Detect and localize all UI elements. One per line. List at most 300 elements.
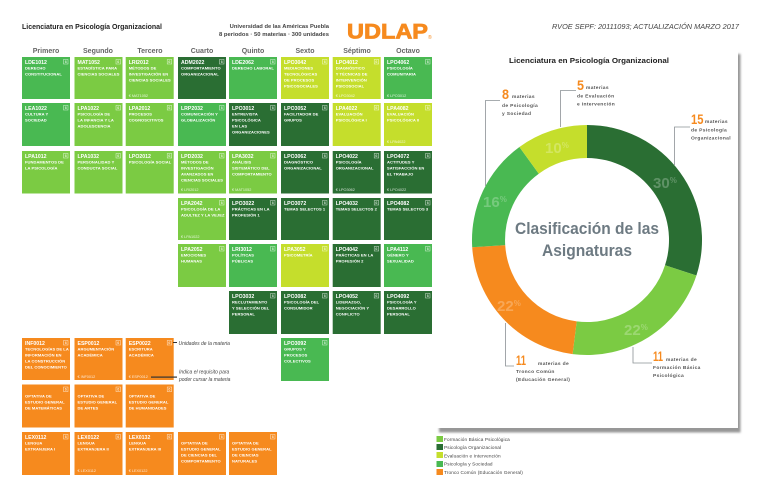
callout: 11 materias formación básica: 11	[653, 349, 663, 364]
donut center label: Clasificación de las	[515, 220, 659, 238]
legend: Psicología y Sociedad	[444, 462, 493, 466]
callout: 5 materias	[560, 78, 615, 127]
card: LPO4042: LPO4042	[336, 247, 358, 253]
card: ESP0012: ACADÉMICA	[78, 352, 103, 358]
university info: Universidad de las Américas Puebla	[230, 24, 330, 30]
card: LPO3022: PROFESIÓN 1	[232, 212, 260, 218]
card: LPO3082: PSICOLOGÍA DEL	[284, 300, 320, 304]
card: LEX0132: € LEX0122	[129, 469, 147, 473]
semester headers: Octavo	[396, 48, 420, 55]
card: optativa ciencias naturales: ESTUDIO GENERAL	[232, 446, 272, 452]
card: LPA1032: LPA1032	[78, 154, 99, 160]
card: LPO3022: 6	[272, 201, 274, 205]
card: LPO4072: LPO4072	[387, 154, 409, 160]
card: ESP0022: ESCRITURA	[129, 346, 153, 352]
card: LPO4062: 6	[427, 60, 429, 64]
semester headers: Quinto	[242, 48, 264, 55]
card: LPA2052: EMOCIONES	[181, 252, 206, 258]
card: optativa humanidades: OPTATIVA DE	[129, 394, 156, 398]
card: INF0012: INFORMACIÓN EN	[25, 352, 61, 358]
card: LPA3032: COMPORTAMIENTO	[232, 172, 272, 176]
callout: 11 materias formación básica	[633, 347, 701, 379]
card: LPO3072: TEMAS SELECTOS 1	[284, 206, 326, 212]
card: LPA1022: PSICOLOGÍA DE	[78, 112, 110, 116]
accreditation note: RVOE SEPF: 20111093; ACTUALIZACIÓN MARZO 2017	[552, 22, 740, 31]
card: LDE1012: 6	[65, 60, 67, 64]
card: LPA1032: CONDUCTA SOCIAL	[78, 166, 118, 170]
donut chart: 30	[653, 175, 670, 192]
card: LPA2052: 6	[221, 247, 223, 251]
callout: 11 materias tronco común: 11	[516, 353, 526, 368]
card: LPO4082: LPO4082	[387, 201, 409, 207]
card: LEX0122: LEX0122	[78, 435, 99, 441]
card: optativa humanidades: 6	[168, 388, 170, 392]
card: LPO3032: LPO3032	[232, 294, 254, 300]
card: LRP2032: COMUNICACIÓN Y	[181, 112, 218, 116]
card: LRP2032: GLOBALIZACIÓN	[181, 118, 215, 122]
card: LEA1022: 6	[65, 106, 67, 110]
semester headers: Séptimo	[343, 48, 371, 55]
card: LPA3032: 6	[272, 154, 274, 158]
card: LEA1022: CULTURA Y	[25, 112, 49, 116]
card: LDE1012: DERECHO	[25, 66, 46, 70]
card: optativa ciencias del comportamiento: ESTUDIO GENERAL	[181, 446, 221, 452]
card: LPD2032: INVESTIGACIÓN	[181, 166, 214, 170]
card: ADM2022: 6	[221, 60, 223, 64]
card: LPO4092: 6	[427, 294, 429, 298]
card: LPO4042: PRÁCTICAS EN LA	[336, 252, 373, 258]
university info	[219, 24, 330, 38]
card: LPO3072: LPO3072	[284, 201, 306, 207]
card: LDE1012	[22, 57, 70, 99]
card: LPA4022: EVALUACIÓN	[336, 112, 363, 116]
semester headers: Tercero	[137, 48, 163, 55]
donut chart: %	[670, 176, 677, 185]
card: optativa ciencias naturales: NATURALES	[232, 458, 257, 464]
card: LPD2032	[178, 151, 226, 194]
card: MAT1052	[74, 57, 122, 99]
card: LDE2062	[229, 57, 277, 99]
card: ADM2022: COMPORTAMIENTO	[181, 66, 221, 70]
card: LPO3042: MEDIACIONES	[284, 66, 313, 70]
donut chart: %	[562, 141, 569, 150]
legend: Tronco Común (Educación General)	[444, 470, 523, 475]
card: LPD2032: AVANZADOS EN	[181, 172, 213, 176]
card: LEX0122: LENGUA	[78, 440, 95, 446]
card: optativa ciencias del comportamiento: DE CIENCIAS DEL	[181, 452, 218, 458]
card: LPO3012: PSICOLÓGICA	[232, 118, 261, 122]
card: LPO4072: EL TRABAJO	[387, 172, 413, 176]
card: LPO3062: ORGANIZACIONAL	[284, 166, 322, 170]
card: LPO3052: LPO3052	[284, 106, 306, 112]
callout: 15 materias: materias	[705, 119, 728, 125]
card: LPO3012: ORGANIZACIONES	[232, 130, 270, 134]
card: LPA2012: PROCESOS	[129, 112, 152, 116]
card: LPO3072	[281, 198, 329, 240]
legend: Psicología Organizacional	[444, 445, 501, 450]
callout: 8 materias: de Psicología	[502, 103, 538, 109]
callout: 5 materias: de Evaluación	[577, 94, 614, 100]
card: LPA4112	[384, 244, 432, 287]
card: MAT1052: ESTADÍSTICA PARA	[78, 66, 117, 70]
card: LPO2012: LPO2012	[129, 154, 151, 160]
card: LPA4112: GÉNERO Y	[387, 252, 409, 258]
card: LPO4052: CONFLICTO	[336, 312, 360, 316]
card: optativa ciencias del comportamiento	[178, 432, 226, 475]
card: LPO3032: PERSONAL	[232, 312, 255, 316]
card: LPO4012: PSICOSOCIAL	[336, 84, 365, 88]
card: ESP0012: € INF0012	[78, 375, 95, 379]
card: INF0012	[22, 338, 70, 380]
card: LPA3032: ANÁLISIS	[232, 160, 252, 164]
card: LPO4082	[384, 198, 432, 240]
callout: 8 materias: 8	[502, 87, 509, 102]
card: LPO4032: LPO4032	[336, 201, 358, 207]
card: LPA2042: ADULTEZ Y LA VEJEZ	[181, 212, 225, 218]
callout: 11 materias formación básica: Formación Básica	[653, 365, 701, 371]
donut center label: Asignaturas	[542, 242, 632, 260]
callout: 5 materias: materias	[586, 85, 609, 91]
card: LPO4022	[333, 151, 381, 194]
callout: 15 materias: 15	[691, 112, 704, 127]
card: LEX0112: 6	[65, 435, 67, 439]
card: LPD2032: € LRI2012	[181, 188, 199, 192]
callout: 5 materias: 5	[577, 78, 584, 93]
card: LPA2012	[126, 103, 174, 146]
card: LPO4052: NEGOCIACIÓN Y	[336, 306, 369, 310]
callout: 11 materias formación básica: Psicológica	[653, 373, 684, 379]
card: LPA3032	[229, 151, 277, 194]
donut chart: %	[500, 195, 507, 204]
card: LPA4082: PSICOLÓGICA II	[387, 118, 419, 122]
card: LPD2032: LPD2032	[181, 154, 203, 160]
card: LPA2042: LPA2042	[181, 201, 203, 207]
card: LPA4082	[384, 103, 432, 146]
donut chart: %	[514, 299, 521, 308]
card: LPO3012: LPO3012	[232, 106, 254, 112]
card: LPO3022: PRÁCTICAS EN LA	[232, 206, 270, 212]
callout: 11 materias tronco común	[506, 323, 570, 383]
logo: UDLAP: UDLAP	[347, 20, 428, 44]
card: LPA1022: ADOLESCENCIA	[78, 124, 111, 128]
annotation: requisito: Indica el requisito para	[179, 370, 230, 376]
card: LPA1012: LA PSICOLOGÍA	[25, 166, 57, 170]
card: LPO3032	[229, 291, 277, 334]
card: LPO4022: ORGANIZACIONAL	[336, 166, 374, 170]
card: LRI3012	[229, 244, 277, 287]
card: LPD2032: MÉTODOS DE	[181, 160, 209, 164]
annotation: requisito	[151, 370, 231, 383]
card: LPO4052: LIDERAZGO,	[336, 300, 361, 304]
card: LRI2012: 6	[168, 60, 170, 64]
card: LPO3062	[281, 151, 329, 194]
card: LPO3012: 6	[272, 106, 274, 110]
card: LDE2062: LDE2062	[232, 60, 254, 66]
card: LPA1022: 6	[117, 106, 119, 110]
card: LPO4012: Y TÉCNICAS DE	[336, 72, 368, 76]
card: LPO4072: 6	[427, 154, 429, 158]
callout: 5 materias: e Intervención	[577, 102, 615, 108]
card: LPO2012: PSICOLOGÍA SOCIAL	[129, 160, 172, 164]
card: LPA1022: LA INFANCIA Y LA	[78, 118, 114, 122]
card: LPO3052	[281, 103, 329, 146]
card: optativa matemáticas: DE MATEMÁTICAS	[25, 406, 62, 410]
card: LEX0122: EXTRANJERA II	[78, 446, 109, 452]
card: optativa ciencias naturales: 6	[272, 435, 274, 439]
semester headers: Sexto	[295, 48, 315, 55]
card: LPO3032: Y SELECCIÓN DEL	[232, 306, 270, 310]
card: LPO4042	[333, 244, 381, 287]
card: LRP2032: LRP2032	[181, 106, 203, 112]
card: LPO3032: 6	[272, 294, 274, 298]
legend: Evaluación e Intervención	[444, 454, 501, 458]
card: LPO4012: DIAGNÓSTICO	[336, 66, 365, 70]
card: LPO3022: LPO3022	[232, 201, 254, 207]
card: LPO4062: € LPO3012	[387, 94, 406, 98]
card: INF0012: 6	[65, 341, 67, 345]
callout: 15 materias: de Psicología	[691, 128, 727, 134]
donut chart: 22	[497, 298, 514, 315]
card: LPO4082: TEMAS SELECTOS 3	[387, 206, 429, 212]
card: ADM2022: ORGANIZACIONAL	[181, 72, 219, 76]
card: LPO4052: LPO4052	[336, 294, 358, 300]
card: optativa ciencias naturales: DE CIENCIAS	[232, 452, 259, 458]
semester headers: Primero	[33, 48, 59, 55]
card: LRI2012: € MAT1052	[129, 94, 148, 98]
card: LPA2052: HUMANAS	[181, 258, 202, 264]
donut chart	[472, 125, 702, 355]
card: LPO3032: RECLUTAMIENTO	[232, 300, 267, 304]
card: LPD2032: 6	[221, 154, 223, 158]
card: LPO3082: LPO3082	[284, 294, 306, 300]
card: LPA4082: € LPA4022	[387, 140, 406, 144]
card: INF0012: LA CONSTRUCCIÓN	[25, 358, 65, 364]
card: LPA2042: € LPA1022	[181, 235, 200, 239]
card: LPO4072: ACTITUDES Y	[387, 160, 415, 164]
card: LPO3062: 6	[324, 154, 326, 158]
semester headers: Cuarto	[191, 48, 213, 55]
panel: chart	[436, 50, 740, 432]
card: LDE1012: LDE1012	[25, 60, 47, 66]
card: LPA2042	[178, 198, 226, 240]
callout: 8 materias: y Sociedad	[502, 111, 531, 117]
card: LPO2012	[126, 151, 174, 194]
card: LPA4022: 6	[375, 106, 377, 110]
card: ESP0022: ACADÉMICA	[129, 352, 154, 358]
card: LEX0132: 6	[168, 435, 170, 439]
card: LDE1012: CONSTITUCIONAL	[25, 72, 62, 76]
card: LPO3072: 6	[324, 201, 326, 205]
card: LEA1022	[22, 103, 70, 146]
card: LRI3012: POLÍTICAS	[232, 252, 254, 258]
card: LPD2032: CIENCIAS SOCIALES	[181, 178, 223, 182]
card: LPO3042: TECNOLÓGICAS	[284, 72, 317, 76]
card: LPO4092: PSICOLOGÍA Y	[387, 300, 417, 304]
card: LPO3012	[229, 103, 277, 146]
card: LPA2012: 6	[168, 106, 170, 110]
card: LRI2012: MÉTODOS DE	[129, 66, 157, 70]
card: LPA2012: LPA2012	[129, 106, 150, 112]
card: LPA4112: 6	[427, 247, 429, 251]
card: LRI3012: PÚBLICAS	[232, 258, 253, 264]
card: LEX0112	[22, 432, 70, 475]
card: LPA1012: FUNDAMENTOS DE	[25, 160, 64, 164]
card: LPA3052: PSICOMETRÍA	[284, 252, 313, 258]
card: LPO3092: LPO3092	[284, 341, 306, 347]
title: Licenciatura en Psicología Organizacional	[22, 22, 162, 31]
card: LPO2012: 6	[168, 154, 170, 158]
card: LPO4022: PSICOLOGÍA	[336, 160, 362, 164]
card: LPO3012: EN LAS	[232, 124, 247, 128]
card: LPO3042: LPO3042	[284, 60, 306, 66]
callout: 11 materias formación básica: materias de	[666, 357, 697, 363]
card: LPO4022: 6	[375, 154, 377, 158]
card: LDE2062: 6	[272, 60, 274, 64]
card: LPO4012: € LPO3042	[336, 94, 355, 98]
card: optativa ciencias del comportamiento: COMPORTAMIENTO	[181, 458, 221, 464]
card: optativa matemáticas: OPTATIVA DE	[25, 394, 52, 398]
card: LEX0112: EXTRANJERA I	[25, 446, 55, 452]
callout: 15 materias	[674, 112, 731, 165]
card: LEX0132	[126, 432, 174, 475]
card: ESP0022: € ESP0012	[129, 375, 148, 379]
card: LPO3062: LPO3062	[284, 154, 306, 160]
card: LPO4072	[384, 151, 432, 194]
donut chart: 10	[545, 140, 562, 157]
card: LPA1022	[74, 103, 122, 146]
card: optativa artes: ESTUDIO GENERAL	[78, 400, 118, 404]
card: LPA1032	[74, 151, 122, 194]
card: LPO3012: ENTREVISTA	[232, 112, 258, 116]
card: LPO4042: 6	[375, 247, 377, 251]
card: LDE2062: DERECHO LABORAL	[232, 66, 274, 70]
card: LPO4032	[333, 198, 381, 240]
university info: 8 periodos · 50 materias · 300 unidades	[219, 32, 329, 38]
card: LPO3092: COLECTIVOS	[284, 358, 311, 364]
card: LEX0122: € LEX0112	[78, 469, 96, 473]
card: LPO3092: GRUPOS Y	[284, 346, 306, 352]
card: LPO4042: PROFESIÓN 2	[336, 258, 364, 264]
chart title: Licenciatura en Psicología Organizacional	[509, 56, 669, 65]
card: LPO3092: PROCESOS	[284, 352, 308, 358]
card: LRI2012: INVESTIGACIÓN EN	[129, 72, 168, 76]
card: ESP0012: ARGUMENTACIÓN	[78, 346, 114, 352]
card: ESP0012: 6	[117, 341, 119, 345]
card: LPO3092: 6	[324, 341, 326, 345]
card: optativa ciencias del comportamiento: 6	[221, 435, 223, 439]
card: LPA4082: 6	[427, 106, 429, 110]
card: LPA3032: SISTEMÁTICO DEL	[232, 166, 270, 170]
card: LPO4062	[384, 57, 432, 99]
card: LPA4082: LPA4082	[387, 106, 409, 112]
card: LRI2012	[126, 57, 174, 99]
card: LRI2012: LRI2012	[129, 60, 149, 66]
card: LPO4052: 6	[375, 294, 377, 298]
callout: 15 materias: Organizacional	[691, 136, 731, 142]
semester headers	[33, 48, 420, 55]
card: LPA1022: LPA1022	[78, 106, 99, 112]
card: LPO3082	[281, 291, 329, 334]
card: LPO4072: € LPO4022	[387, 188, 406, 192]
card: ESP0022: ESP0022	[129, 341, 151, 347]
card: LEA1022: SOCIEDAD	[25, 118, 47, 122]
card: LPA2042: PSICOLOGÍA DE LA	[181, 206, 220, 212]
card: LPO4062: LPO4062	[387, 60, 409, 66]
card: LPO3052: GRUPOS	[284, 118, 302, 122]
card: optativa ciencias naturales	[229, 432, 277, 475]
card: LPA1012	[22, 151, 70, 194]
card: LPA4022: LPA4022	[336, 106, 357, 112]
card: LPO3052: 6	[324, 106, 326, 110]
card: LPA3052	[281, 244, 329, 287]
card: LPO3022	[229, 198, 277, 240]
callout: 11 materias tronco común: Tronco Común	[516, 369, 555, 375]
card: optativa artes: DE ARTES	[78, 406, 98, 410]
card: LPO4092: DESARROLLO	[387, 306, 416, 310]
card: LPA4082: EVALUACIÓN	[387, 112, 414, 116]
card: LEX0132: LEX0132	[129, 435, 150, 441]
card: LPA2052	[178, 244, 226, 287]
card: INF0012: TECNOLOGÍAS DE LA	[25, 346, 69, 352]
card: LPO4032: TEMAS SELECTOS 2	[336, 206, 378, 212]
card: LPO4062: PSICOLOGÍA	[387, 66, 413, 70]
annotation: unidades: Unidades de la materia	[178, 341, 230, 347]
card: LPO3052: FACILITADOR DE	[284, 112, 319, 116]
card: optativa humanidades	[126, 384, 174, 428]
card: LPA1032: 6	[117, 154, 119, 158]
callout: 8 materias	[486, 87, 538, 186]
card: LPO4032: 6	[375, 201, 377, 205]
card: optativa humanidades: DE HUMANIDADES	[129, 406, 167, 410]
card: MAT1052: 6	[117, 60, 119, 64]
card: LPA2042: 6	[221, 201, 223, 205]
card: LPO4012: 6	[375, 60, 377, 64]
card: LPA4022	[333, 103, 381, 146]
card: LPO4072: SATISFACCIÓN EN	[387, 166, 424, 170]
callout: 11 materias tronco común: materias de	[538, 361, 569, 367]
card: LRI3012: LRI3012	[232, 247, 252, 253]
card: LPO3092	[281, 338, 329, 381]
logo: UDLAP: ®	[428, 34, 432, 41]
card: ADM2022: ADM2022	[181, 60, 204, 66]
card: LEX0122	[74, 432, 122, 475]
card: ESP0022: 6	[168, 341, 170, 345]
card: LRP2032	[178, 103, 226, 146]
card: LPO3042: PSICOSOCIALES	[284, 84, 318, 88]
card: LPA1012: 6	[65, 154, 67, 158]
card: LPO3042	[281, 57, 329, 99]
card: LPO3082: CONSUMIDOR	[284, 306, 313, 310]
card: LEX0112: LENGUA	[25, 440, 42, 446]
card: LRI3012: 6	[272, 247, 274, 251]
card: LPO3042: DE PROCESOS	[284, 78, 314, 82]
card: LPA2012: COGNOSCITIVOS	[129, 118, 164, 122]
card: LPO4022: LPO4022	[336, 154, 358, 160]
card: LPO4052	[333, 291, 381, 334]
card: MAT1052: MAT1052	[78, 60, 100, 66]
card: LRP2032: 6	[221, 106, 223, 110]
card: LPA4022: PSICOLÓGICA I	[336, 118, 367, 122]
donut chart: 16	[483, 194, 500, 211]
legend	[436, 436, 523, 475]
card: ADM2022	[178, 57, 226, 99]
card: LPA4112: SEXUALIDAD	[387, 258, 414, 264]
annotation: requisito: poder cursar la materia	[178, 377, 231, 383]
card: LEX0122: 6	[117, 435, 119, 439]
donut center label	[515, 220, 659, 260]
card: MAT1052: CIENCIAS SOCIALES	[78, 72, 120, 76]
card: ESP0012: ESP0012	[78, 341, 100, 347]
